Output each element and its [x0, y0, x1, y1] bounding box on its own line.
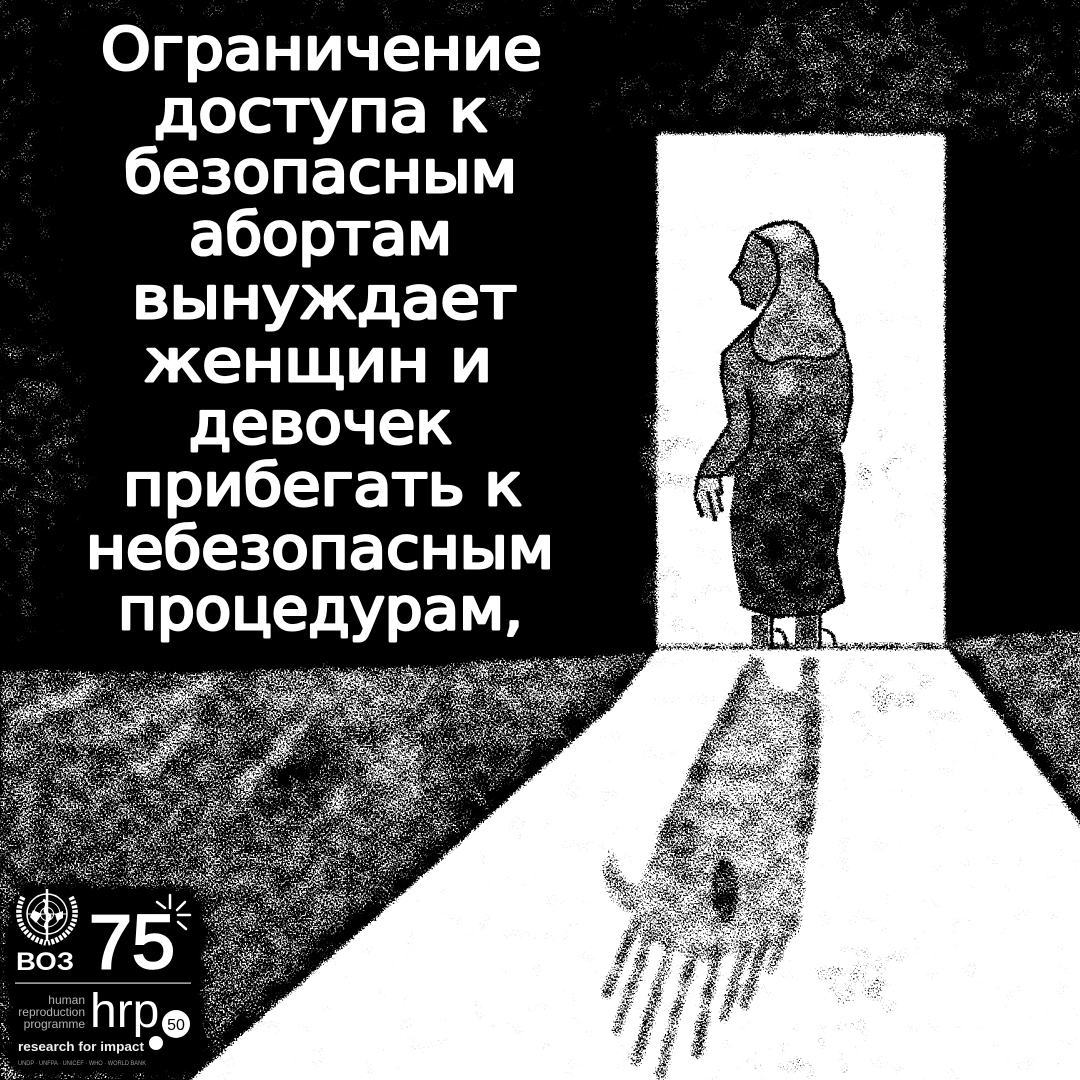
- floor left: diagonal chalk strokes: [20, 680, 345, 810]
- figure outline: [695, 222, 852, 647]
- hand: [695, 477, 722, 520]
- hair: [751, 222, 845, 363]
- threshold line: [657, 643, 950, 645]
- shadow: side streams: [670, 657, 813, 833]
- line 6: женщин и: [144, 327, 492, 395]
- back highlight: [777, 365, 797, 395]
- line 4: абортам: [189, 200, 452, 268]
- icon: WHO emblem: [19, 889, 75, 943]
- human reproduction programme label: reproduction: [18, 1005, 85, 1019]
- icon: sun rays: [157, 895, 190, 929]
- lit floor path: [185, 649, 1080, 1080]
- shadow of the woman on the floor: [600, 657, 818, 1073]
- floor left: light and dark patches: [0, 671, 620, 1020]
- icon: 50 badge: [162, 1010, 190, 1038]
- legs and shoes: [752, 615, 817, 647]
- line 1: Ограничение: [101, 15, 542, 83]
- torso and arms: [698, 320, 852, 617]
- line 3: безопасным: [124, 138, 517, 206]
- line 2: доступа к: [154, 77, 488, 145]
- logo divider: [15, 982, 191, 984]
- floor right edge shade: [960, 665, 1080, 830]
- logos block: [15, 889, 191, 1067]
- dark wall with sparse speckle: [0, 0, 1080, 670]
- floor speckle clusters: [656, 400, 950, 1075]
- line 10: процедурам,: [118, 575, 523, 643]
- human reproduction programme label: programme: [24, 1017, 85, 1031]
- black band below the text: [0, 642, 660, 666]
- 75 anniversary mark: 75: [89, 900, 175, 985]
- floor left: textured dark ground: [0, 652, 650, 1080]
- line 8: прибегать к: [123, 451, 522, 519]
- partners line: UNDP · UNFPA · UNICEF · WHO · WORLD BANK: [18, 1060, 147, 1067]
- floor left edge shade: [190, 680, 640, 1080]
- woman standing in the doorway: [695, 222, 852, 647]
- door: bright opening: [657, 134, 945, 646]
- line 7: девочек: [189, 389, 452, 457]
- title text: [86, 15, 554, 643]
- icon: dot: [149, 1036, 163, 1050]
- skirt: [730, 380, 844, 617]
- line 5: вынуждает: [132, 264, 517, 332]
- shadow: upper fan: [630, 657, 818, 963]
- shadow: fingers: [607, 920, 793, 1073]
- logo backing panel: [8, 888, 203, 1074]
- hair highlight: [763, 224, 797, 239]
- ВОЗ label: ВОЗ: [16, 948, 74, 976]
- icon: 50 badge: 50: [167, 1017, 185, 1034]
- human reproduction programme label: human: [48, 993, 85, 1007]
- line 9: небезопасным: [86, 514, 554, 582]
- research for impact tagline: research for impact: [18, 1039, 145, 1054]
- shadow: hand blob: [600, 847, 647, 917]
- floor right: textured dark ground: [948, 630, 1080, 830]
- shadow: dark core: [712, 858, 738, 922]
- human reproduction programme label: [18, 993, 85, 1031]
- face: [730, 235, 779, 308]
- hrp wordmark: hrp: [90, 985, 159, 1038]
